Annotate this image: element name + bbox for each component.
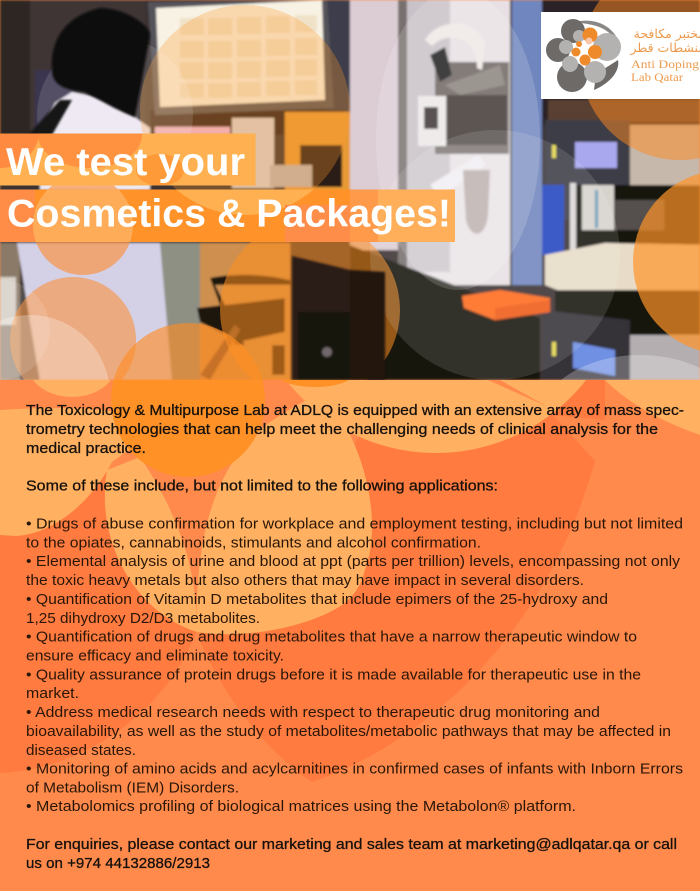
shape: thin sliver in top circle xyxy=(488,380,546,406)
photo: laboratory scene xyxy=(0,0,700,380)
panel: orange text background xyxy=(0,380,700,782)
list: applications: to the opiates, cannabinoids, stimulants and alcohol confirmation. xyxy=(26,534,481,552)
list: applications: of Metabolism (IEM) Disorders. xyxy=(26,780,239,796)
list: applications: • Monitoring of amino acids and acylcarnitines in confirmed cases of infants with Inborn Errors xyxy=(26,760,683,778)
shape: light top circle xyxy=(288,380,586,453)
shape: right light lobe xyxy=(197,385,372,634)
list: applications: the toxic heavy metals but also others that may have impact in several disorders. xyxy=(26,572,584,589)
text block: intro paragraph: medical practice. xyxy=(26,440,146,457)
shape: dark central lens xyxy=(198,380,605,782)
logo wordmark xyxy=(629,26,700,84)
text block: intro paragraph: The Toxicology & Multipurpose Lab at ADLQ is equipped with an extensive array of mass spec- xyxy=(26,402,684,419)
list: applications xyxy=(26,516,683,815)
list: applications: • Metabolomics profiling of biological matrices using the Metabolon® platform. xyxy=(26,798,576,815)
shape: orange bump at top xyxy=(282,380,348,387)
list: applications: • Drugs of abuse confirmation for workplace and employment testing, including but not limited xyxy=(26,516,683,532)
shape: dark left region xyxy=(0,468,197,773)
text block: intro paragraph: trometry technologies that can help meet the challenging needs of clinical analysis for the xyxy=(26,421,658,438)
shape: light small top arc xyxy=(33,380,111,397)
list: applications: 1,25 dihydroxy D2/D3 metabolites. xyxy=(26,610,260,627)
text block: intro paragraph xyxy=(26,402,684,457)
photo: blurred lab background and equipment xyxy=(0,0,700,380)
list: applications: bioavailability, as well as the study of metabolites/metabolic pathways that may be affected in xyxy=(26,723,671,740)
shape: saturated orange circle xyxy=(111,380,265,477)
text block: applications lead-in: Some of these include, but not limited to the following applications: xyxy=(26,478,498,494)
heading text line 1: We test your xyxy=(6,141,245,184)
list: applications: ensure efficacy and eliminate toxicity. xyxy=(26,648,284,664)
list: applications: • Quantification of Vitamin D metabolites that include epimers of the 25-hydroxy and xyxy=(26,591,608,608)
list: applications: • Quantification of drugs and drug metabolites that have a narrow therapeutic window to xyxy=(26,628,637,646)
logo wordmark: Anti Doping xyxy=(631,59,699,71)
list: applications: • Address medical research needs with respect to therapeutic drug monitoring and xyxy=(26,704,600,721)
logo: Anti Doping Lab Qatar xyxy=(541,12,700,99)
list: applications: diseased states. xyxy=(26,742,136,759)
text block: contact details: us on +974 44132886/2913 xyxy=(26,855,210,872)
photo: technician hijab and dark desk in front of overlays xyxy=(28,8,385,380)
shape: light left area xyxy=(0,408,133,536)
list: applications: • Elemental analysis of urine and blood at ppt (parts per trillion) levels, encompassing not only xyxy=(26,553,681,570)
text block: contact details xyxy=(26,836,677,872)
icon: logo circle cluster xyxy=(546,19,621,92)
heading text line 2: Cosmetics & Packages! xyxy=(7,192,451,236)
shape: left light lobe xyxy=(105,457,197,632)
overlay: translucent circles on photo xyxy=(0,0,700,485)
heading band: Cosmetics & Packages xyxy=(0,190,455,242)
logo wordmark: Lab Qatar xyxy=(631,72,683,84)
list: applications: market. xyxy=(26,685,79,702)
text block: contact details: For enquiries, please contact our marketing and sales team at marketing@adlqatar.qa or call xyxy=(26,836,677,853)
shape: light top-right area xyxy=(605,380,700,435)
heading band: We test your xyxy=(0,134,256,186)
list: applications: • Quality assurance of protein drugs before it is made available for therapeutic use in the xyxy=(26,666,641,684)
